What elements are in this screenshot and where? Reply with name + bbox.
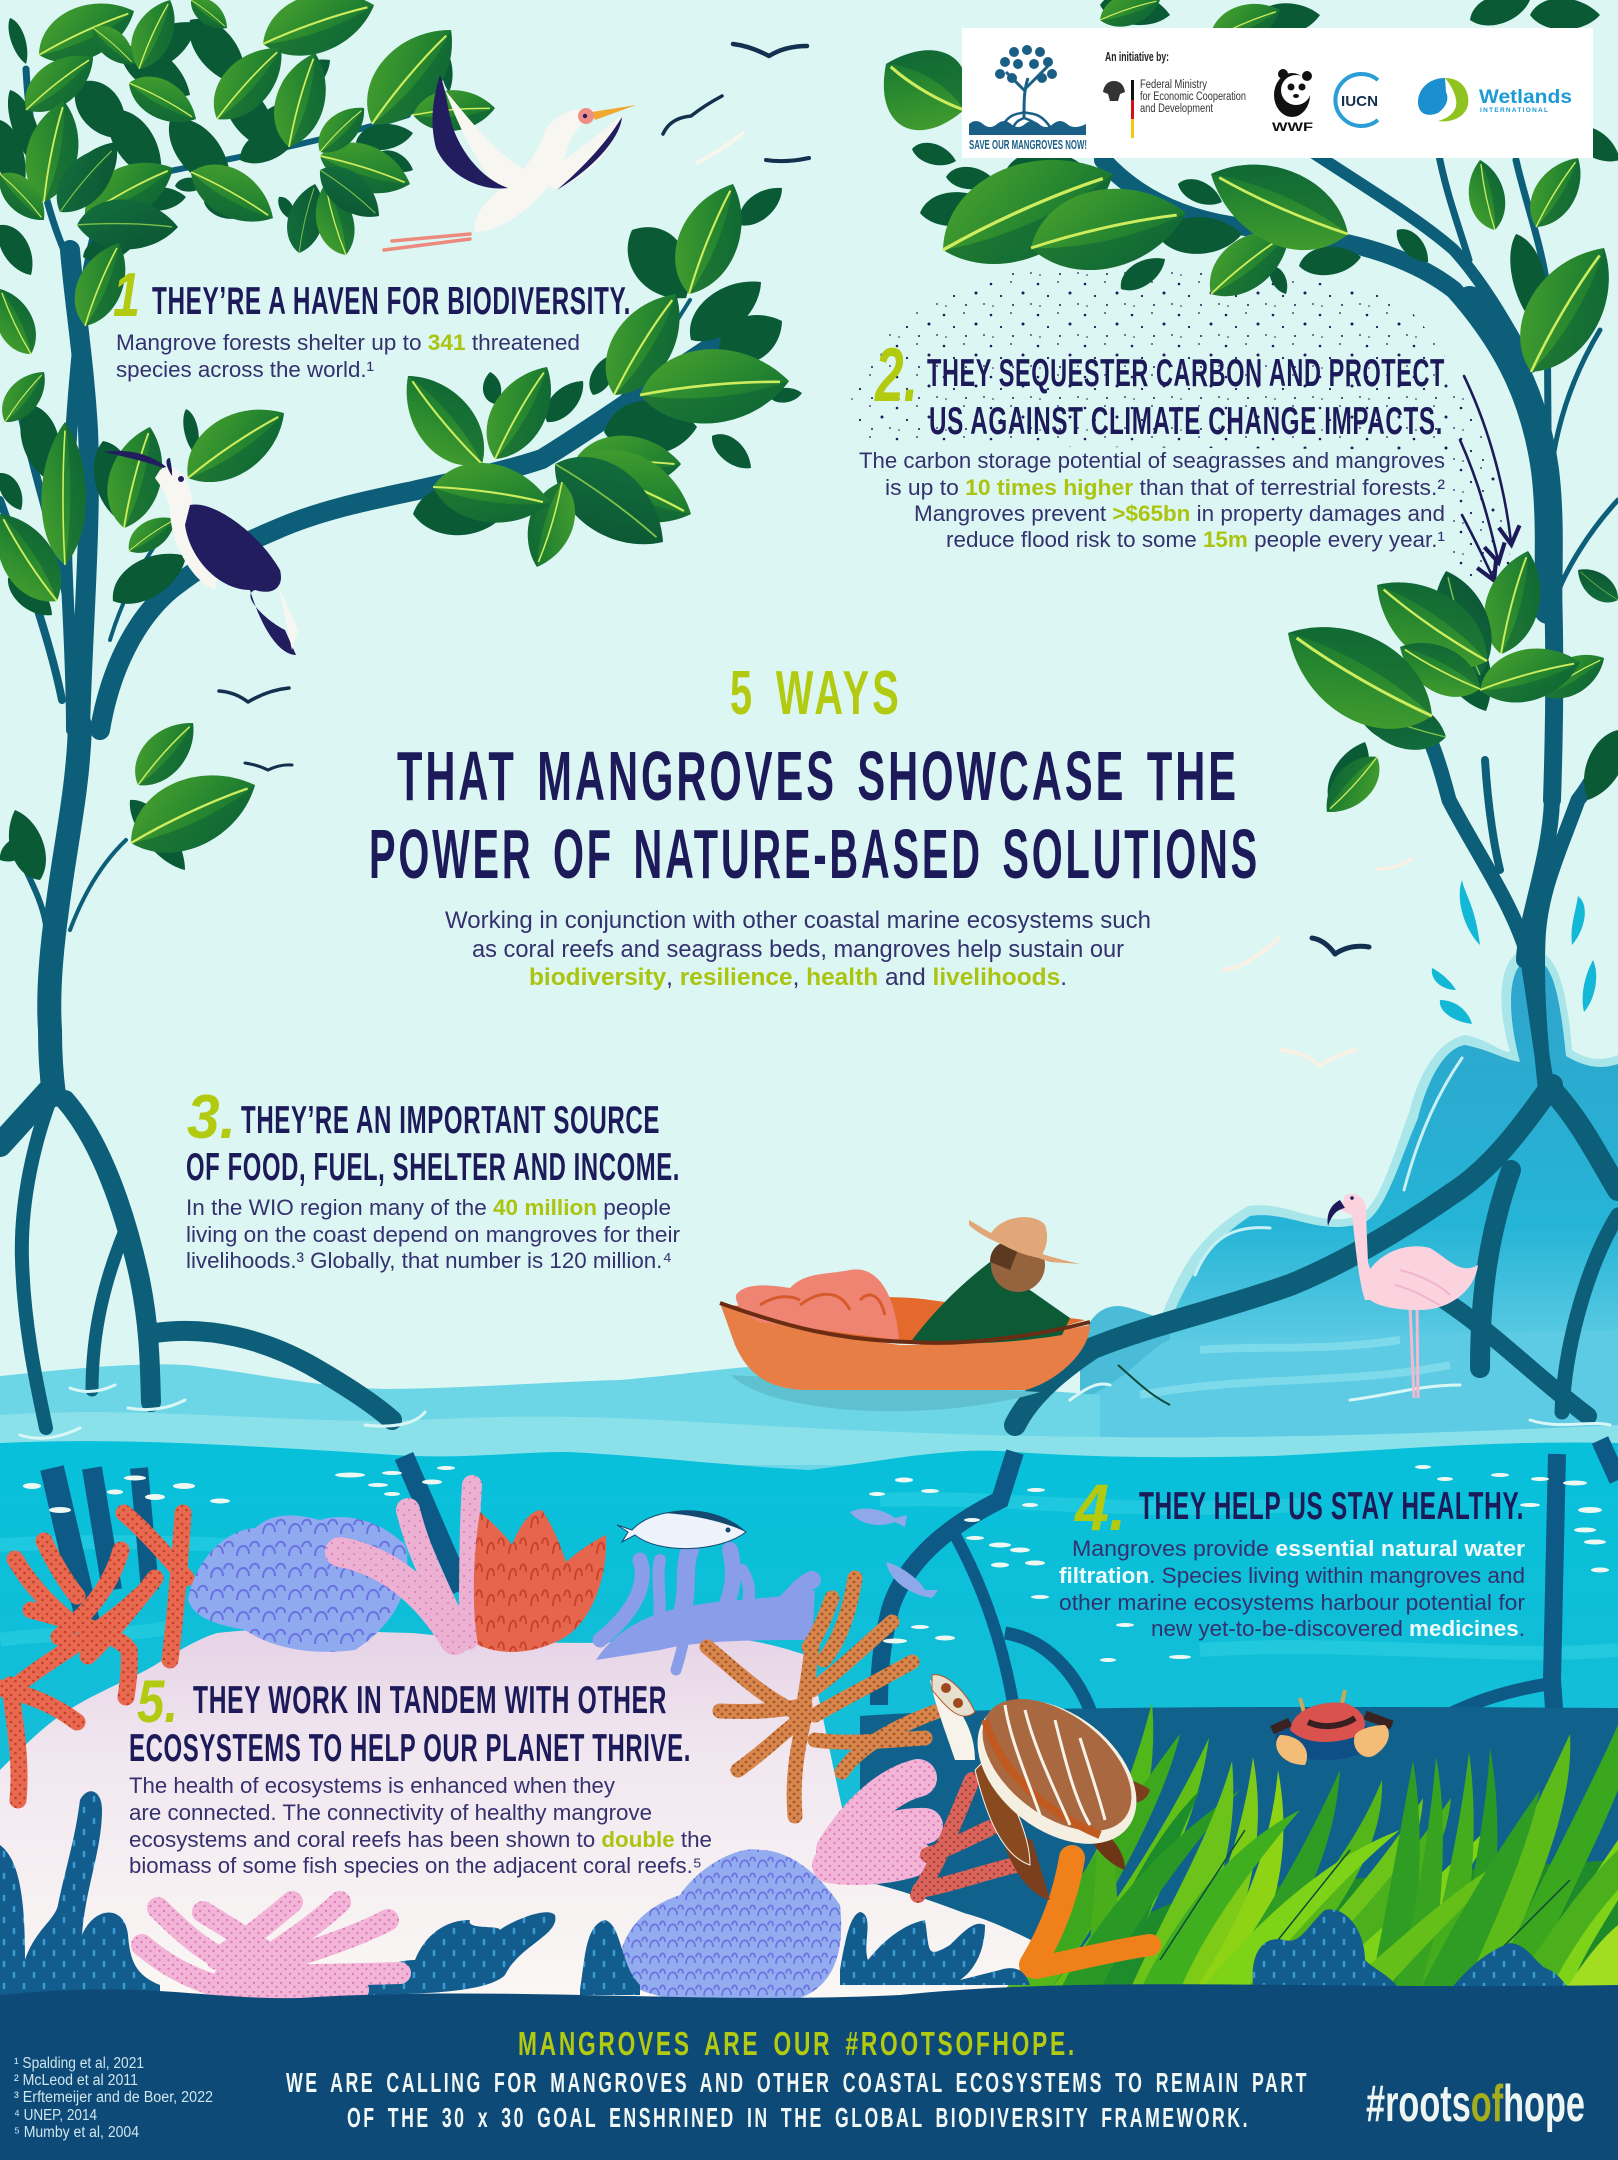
heading 5 <box>129 1679 691 1770</box>
body 2: reduce flood risk to some 15m people every year.¹ <box>946 527 1445 552</box>
logo: IUCN <box>1335 74 1378 126</box>
references: ⁴ UNEP, 2014 <box>14 2107 97 2124</box>
logo: An initiative by: An initiative by: <box>1105 50 1169 64</box>
dark background leaves <box>0 0 1618 886</box>
number 3: 3. <box>187 1083 236 1152</box>
flamingo <box>1328 1194 1478 1398</box>
turtle <box>930 1671 1164 1900</box>
section 5 <box>129 1668 712 1878</box>
coral: red fan <box>474 1510 606 1652</box>
surface water <box>0 1330 1618 1470</box>
body 2: Mangroves prevent >$65bn in property damages and <box>914 501 1445 526</box>
number 2: 2. <box>874 333 918 418</box>
seagrass <box>1005 1702 1618 1995</box>
number 1: 1 <box>113 261 140 330</box>
intro text <box>445 907 1151 991</box>
main title <box>369 659 1260 893</box>
heading 1: THEY’RE A HAVEN FOR BIODIVERSITY. <box>152 280 631 323</box>
coral: periwinkle fan <box>188 1515 408 1652</box>
number 5: 5. <box>137 1668 178 1735</box>
bottom deep band <box>0 1984 1618 2160</box>
coral: orange-brown branch coral <box>707 1578 935 1816</box>
left tree foliage <box>0 0 792 872</box>
white fish <box>617 1510 746 1549</box>
intro text: as coral reefs and seagrass beds, mangroves help sustain our <box>472 936 1124 963</box>
water hills on the right <box>1080 880 1618 1440</box>
logo: IUCN: IUCN <box>1341 93 1378 110</box>
hornbill bird <box>104 451 298 655</box>
small blue fish <box>850 1509 938 1598</box>
school of small white fish <box>23 1465 1609 1662</box>
body 5: are connected. The connectivity of healthy mangrove <box>129 1800 652 1825</box>
logo: German federal ministry <box>1103 79 1246 138</box>
logo: German federal ministry: Federal Ministry <box>1140 79 1207 91</box>
title: 5 ways: 5 WAYS <box>730 659 902 728</box>
right mangrove tree trunks and roots <box>1015 150 1618 1425</box>
sand mound <box>0 1629 1095 2010</box>
logo: WWF panda: WWF <box>1272 120 1313 134</box>
logo: German federal ministry: for Economic Cooperation <box>1140 91 1246 103</box>
logo: Wetlands International: Wetlands <box>1479 87 1572 108</box>
body 4: other marine ecosystems harbour potential for <box>1059 1590 1526 1615</box>
boat with fisher <box>720 1217 1170 1411</box>
crab <box>1272 1690 1392 1765</box>
deep turquoise sea <box>0 1441 1618 1900</box>
body 1: Mangrove forests shelter up to 341 threatened <box>116 330 580 355</box>
intro text: biodiversity, resilience, health and livelihoods. <box>529 964 1067 991</box>
section 1 <box>113 261 631 382</box>
heading 5: THEY WORK IN TANDEM WITH OTHER <box>193 1679 667 1722</box>
body 3: In the WIO region many of the 40 million people <box>186 1195 671 1220</box>
references: ⁵ Mumby et al, 2004 <box>14 2124 139 2141</box>
body 2: is up to 10 times higher than that of terrestrial forests.² <box>885 475 1446 500</box>
intro text: Working in conjunction with other coastal marine ecosystems such <box>445 907 1151 934</box>
references: ² McLeod et al 2011 <box>14 2072 138 2089</box>
logo panel <box>962 28 1593 158</box>
body 4: Mangroves provide essential natural water <box>1072 1536 1525 1561</box>
logo: Wetlands International: INTERNATIONAL <box>1480 107 1548 114</box>
body 4: filtration. Species living within mangroves and <box>1059 1563 1525 1588</box>
logo: Save Our Mangroves Now <box>969 45 1087 152</box>
underwater mangrove roots <box>52 1440 1618 1771</box>
call to action <box>286 2025 1309 2133</box>
logo: Wetlands International <box>1418 78 1572 121</box>
body 3: living on the coast depend on mangroves for their <box>186 1222 680 1247</box>
heading 2 <box>927 352 1445 443</box>
body 5: ecosystems and coral reefs has been shown to double the <box>129 1827 712 1852</box>
bottom dark coral silhouettes <box>0 1791 1570 2010</box>
body 5 <box>129 1773 712 1878</box>
coral: pink fingers <box>340 1485 472 1640</box>
left mangrove tree trunks and branches <box>0 69 722 1428</box>
heading 3 <box>186 1099 680 1189</box>
section 4 <box>1059 1470 1526 1641</box>
body 5: biomass of some fish species on the adjacent coral reefs.⁵ <box>129 1853 702 1878</box>
number 4: 4. <box>1073 1470 1126 1544</box>
section 3 <box>186 1083 680 1273</box>
coral: red branch coral <box>0 1513 186 1800</box>
logo: WWF panda <box>1272 69 1313 134</box>
body 2 <box>859 448 1446 552</box>
coral: orange tube <box>1032 1858 1150 1968</box>
sea floor on the right <box>860 1707 1618 2010</box>
body 4: new yet-to-be-discovered medicines. <box>1151 1616 1525 1641</box>
body 1: species across the world.¹ <box>116 357 374 382</box>
call to action: MANGROVES ARE OUR #ROOTSOFHOPE. <box>518 2025 1077 2062</box>
coral: red Y coral <box>918 1780 1028 1895</box>
logo: Save Our Mangroves Now: SAVE OUR MANGROVES NOW! <box>969 137 1087 152</box>
body 5: The health of ecosystems is enhanced when they <box>129 1773 616 1798</box>
crane in flight <box>384 75 636 250</box>
body 3: livelihoods.³ Globally, that number is 120 million.⁴ <box>186 1248 672 1273</box>
carbon arrows <box>1460 376 1511 578</box>
coral: pink bottom coral <box>142 1902 400 2008</box>
body 2: The carbon storage potential of seagrasses and mangroves <box>859 448 1445 473</box>
heading 3: THEY’RE AN IMPORTANT SOURCE <box>241 1099 660 1142</box>
body 3 <box>186 1195 680 1273</box>
body 1 <box>116 330 580 382</box>
coral: pink tube cluster <box>830 1778 925 1867</box>
references <box>14 2055 213 2141</box>
heading 5: ECOSYSTEMS TO HELP OUR PLANET THRIVE. <box>129 1727 691 1770</box>
heading 3: OF FOOD, FUEL, SHELTER AND INCOME. <box>186 1146 680 1189</box>
logo: German federal ministry: and Development <box>1140 103 1214 115</box>
right tree foliage <box>860 0 1618 825</box>
flying birds <box>219 44 1413 1066</box>
references: ¹ Spalding et al, 2021 <box>14 2055 144 2072</box>
references: ³ Erftemeijer and de Boer, 2022 <box>14 2089 213 2106</box>
section 2 <box>859 333 1446 552</box>
coral: big bottom fan <box>619 1849 841 2005</box>
body 4 <box>1059 1536 1526 1641</box>
coral: tube coral <box>596 1550 815 1670</box>
carbon stipple dots <box>850 250 1520 580</box>
ripples around the roots <box>20 1384 1610 1438</box>
